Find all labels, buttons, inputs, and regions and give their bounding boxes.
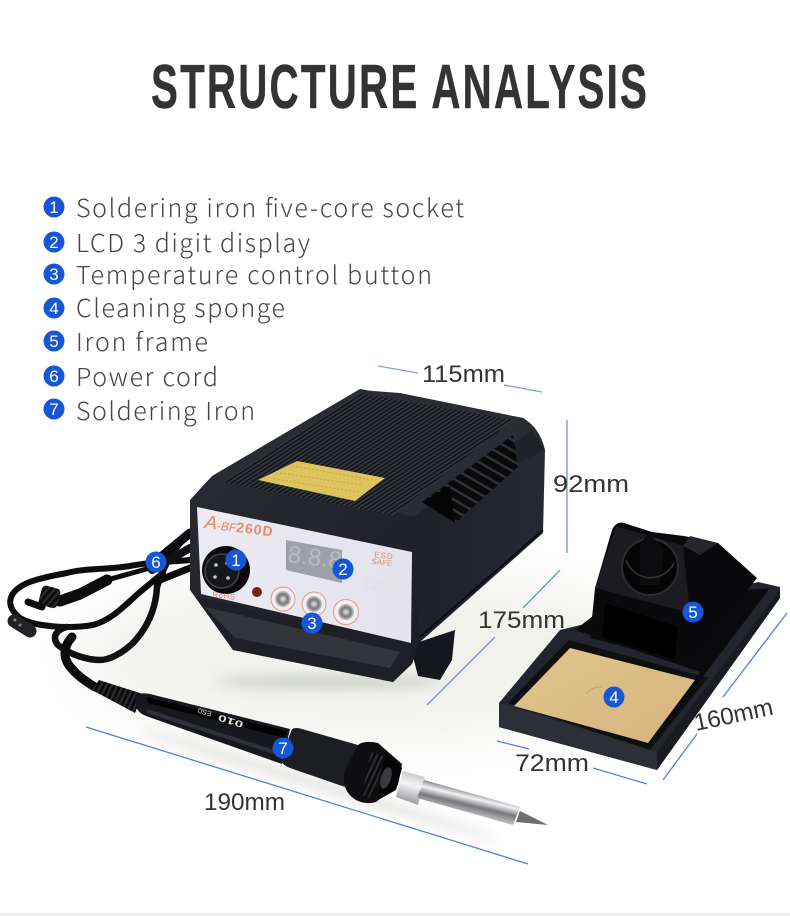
dimension: 115mm xyxy=(378,361,542,392)
side vent xyxy=(422,435,518,523)
badge 2: 2 xyxy=(338,560,348,579)
power cord and iron cable xyxy=(10,533,190,687)
sponge xyxy=(514,648,695,743)
dimension: 115mm: 115mm xyxy=(422,361,505,388)
badge 3: 3 xyxy=(307,614,317,633)
badge 6: 6 xyxy=(151,553,161,572)
tip xyxy=(516,811,548,825)
front panel xyxy=(197,507,412,643)
soldering iron xyxy=(92,680,548,845)
RoHS mark: RoHS xyxy=(212,590,236,602)
list item 7: 7 xyxy=(49,400,59,419)
barrel xyxy=(417,780,520,825)
brand mark: A-BF260D xyxy=(202,512,275,541)
title: STRUCTURE ANALYSIS xyxy=(151,53,647,122)
foot xyxy=(410,630,455,680)
dimension: 72mm xyxy=(497,741,647,784)
dimension: 190mm xyxy=(86,727,528,864)
dimension: 175mm: 175mm xyxy=(478,607,565,634)
holder body xyxy=(590,523,757,663)
lower right edge xyxy=(420,530,543,637)
buttons xyxy=(271,587,358,624)
list item 1: 1 xyxy=(49,198,59,217)
dimension: 72mm: 72mm xyxy=(515,750,589,777)
badge 4 xyxy=(604,686,624,708)
list item 2: 2 xyxy=(49,233,59,252)
soldering station xyxy=(190,389,545,689)
strain relief xyxy=(92,680,143,713)
badge 6 xyxy=(146,552,166,572)
dimension: 160mm xyxy=(663,613,787,780)
badge 7 xyxy=(272,738,294,758)
opening xyxy=(602,603,678,660)
dimension: 175mm xyxy=(427,570,565,705)
list item 6: 6 xyxy=(49,367,59,386)
dimension: 190mm: 190mm xyxy=(204,789,285,816)
dimension: 92mm xyxy=(553,420,629,553)
LCD display: 8.8.8 xyxy=(286,541,343,575)
grip xyxy=(281,728,358,787)
dimension: 160mm: 160mm xyxy=(692,694,775,737)
ESD safe mark: SAFE xyxy=(371,557,393,568)
list item 3: Temperature control button xyxy=(76,256,432,292)
warning label xyxy=(258,461,385,501)
side body xyxy=(360,389,545,660)
handle xyxy=(136,693,290,764)
list item 6: Power cord xyxy=(76,358,218,394)
tray xyxy=(499,582,780,770)
list item 4: 4 xyxy=(49,299,59,318)
socket xyxy=(202,546,250,594)
list item 3: 3 xyxy=(49,265,59,284)
list item 7: Soldering Iron xyxy=(76,392,255,428)
handle print: 010 xyxy=(217,712,245,730)
feature list xyxy=(44,189,464,428)
badge 5 xyxy=(682,602,704,622)
list item 1: Soldering iron five-core socket xyxy=(76,189,464,225)
badge 1: 1 xyxy=(231,551,241,570)
LED xyxy=(252,587,262,597)
dimension: 92mm: 92mm xyxy=(553,471,629,498)
list item 5: Iron frame xyxy=(76,323,208,359)
watt mark: 120W xyxy=(361,576,403,599)
collar xyxy=(344,742,402,803)
soldering iron stand xyxy=(499,523,780,770)
badge 4: 4 xyxy=(609,688,619,707)
steel nut xyxy=(396,771,425,805)
badge 5: 5 xyxy=(688,603,698,622)
tray well xyxy=(508,640,708,750)
list item 4: Cleaning sponge xyxy=(76,289,285,325)
main body xyxy=(190,389,545,682)
list item 5: 5 xyxy=(49,332,59,351)
list item 2: LCD 3 digit display xyxy=(76,224,310,260)
ESD safe mark: ESD xyxy=(374,550,394,561)
badge 3 xyxy=(302,612,322,634)
handle print ESD: ESD xyxy=(197,706,213,717)
iron socket xyxy=(622,533,678,595)
badge 1 xyxy=(226,550,246,570)
badge 7: 7 xyxy=(278,739,288,758)
ribbed top xyxy=(223,393,513,515)
badge 2 xyxy=(332,558,354,580)
front lip xyxy=(196,597,413,682)
